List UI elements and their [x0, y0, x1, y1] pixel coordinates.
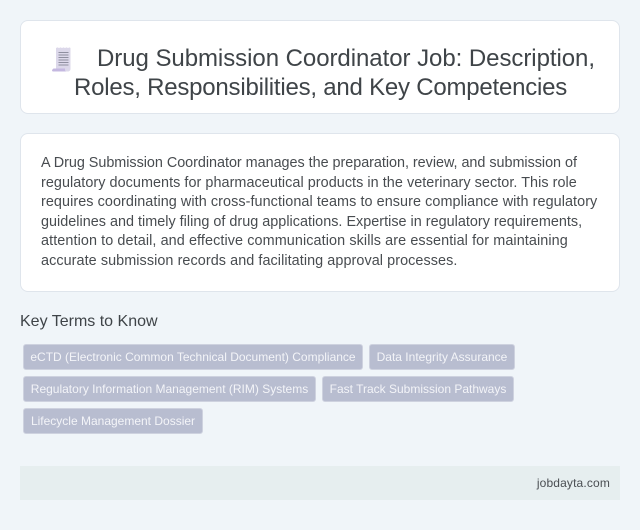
- description text: attention to detail, and effective communication skills are essential for maintaining: [41, 233, 568, 249]
- tag: [23, 408, 203, 434]
- tag: [23, 376, 316, 402]
- description text: regulatory documents for pharmaceutical products in the veterinary sector. This role: [41, 174, 577, 190]
- description text: requires coordinating with cross-functional teams to ensure compliance with regulatory: [41, 194, 597, 210]
- tag: [23, 344, 363, 370]
- header panel: [20, 20, 620, 114]
- icon: document scroll: [52, 48, 70, 72]
- tag: Fast Track Submission Pathways: [330, 382, 506, 396]
- tag: Lifecycle Management Dossier: [31, 414, 195, 428]
- title: Drug Submission Coordinator Job: Description,: [97, 45, 595, 72]
- description panel: [20, 133, 620, 292]
- tag: Regulatory Information Management (RIM) Systems: [31, 382, 308, 396]
- tag: [369, 344, 515, 370]
- key terms tags: [23, 344, 515, 434]
- description text: [41, 155, 598, 268]
- footer source text: jobdayta.com: [537, 476, 610, 490]
- heading: key terms: Key Terms to Know: [20, 313, 158, 330]
- title: Roles, Responsibilities, and Key Competencies: [74, 74, 567, 101]
- title: [74, 45, 595, 101]
- tag: Data Integrity Assurance: [377, 350, 507, 364]
- description text: guidelines and timely filing of drug applications. Expertise in regulatory requirements,: [41, 214, 582, 230]
- description text: accurate submission records and facilitating approval processes.: [41, 252, 457, 268]
- tag: [322, 376, 514, 402]
- description text: A Drug Submission Coordinator manages the preparation, review, and submission of: [41, 155, 577, 171]
- tag: eCTD (Electronic Common Technical Document) Compliance: [30, 350, 356, 364]
- footer bar: [20, 466, 620, 500]
